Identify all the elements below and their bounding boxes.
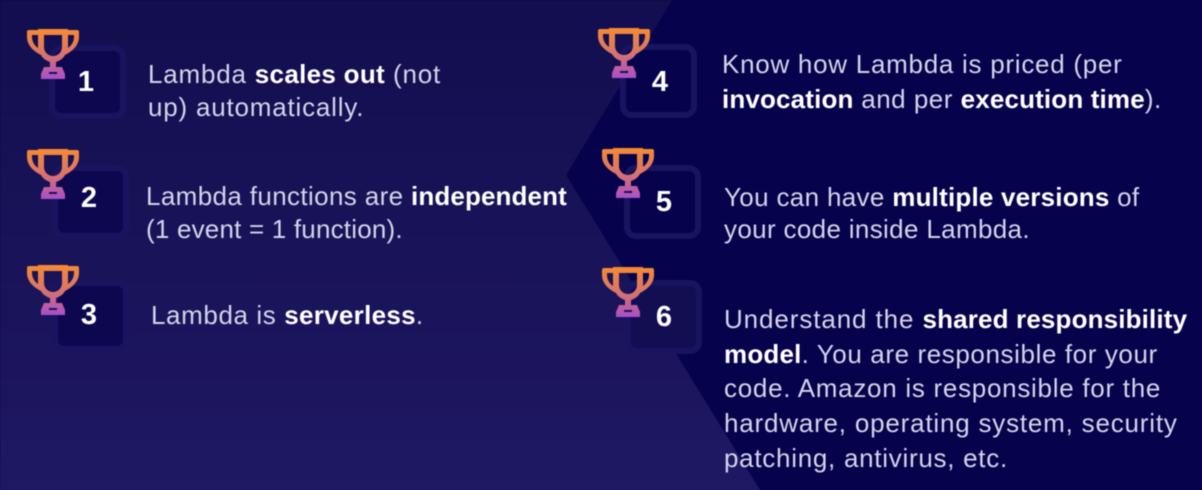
- text 1: Lambda scales out (not: [148, 59, 441, 89]
- text 5: You can have multiple versions of: [724, 182, 1139, 212]
- icon: trophy 1: [26, 28, 80, 80]
- text 5: your code inside Lambda.: [724, 214, 1030, 244]
- number 6: 6: [656, 301, 672, 333]
- text 4: [722, 49, 1162, 114]
- text 6: model. You are responsible for your: [724, 339, 1158, 369]
- icon: trophy 6: [601, 266, 655, 318]
- icon: trophy 3: [26, 264, 80, 316]
- icon: trophy 4: [597, 27, 651, 79]
- number 5: 5: [656, 186, 672, 218]
- icon: trophy 5: [601, 147, 655, 199]
- item 5: [601, 147, 1140, 244]
- number box 3: [52, 280, 129, 352]
- text 1: up) automatically.: [148, 92, 364, 122]
- icon: trophy 2: [26, 148, 80, 200]
- text 3: Lambda is serverless.: [151, 300, 424, 330]
- number 4: 4: [652, 66, 668, 98]
- number 1: 1: [78, 66, 94, 98]
- item 2: [26, 148, 568, 244]
- text 6: code. Amazon is responsible for the: [724, 373, 1161, 403]
- text 4: Know how Lambda is priced (per: [722, 49, 1123, 79]
- text 5: [724, 182, 1140, 244]
- text 1: [148, 59, 441, 122]
- text 6: [724, 304, 1188, 474]
- item 1: [26, 28, 441, 122]
- number box 2: [52, 165, 129, 239]
- item 6: [601, 266, 1188, 474]
- text 2: Lambda functions are independent: [146, 181, 567, 211]
- number 3: 3: [81, 299, 97, 331]
- item 3: [26, 264, 424, 346]
- text 6: patching, antivirus, etc.: [724, 443, 1008, 473]
- text 6: hardware, operating system, security: [724, 408, 1178, 438]
- number box 4: [620, 44, 697, 118]
- text 2: (1 event = 1 function).: [146, 214, 403, 244]
- number box 5: [624, 165, 701, 239]
- text 2: [146, 181, 568, 244]
- number box 6: [625, 280, 702, 354]
- number box 1: [49, 45, 126, 119]
- text 4: invocation and per execution time).: [722, 84, 1162, 114]
- item 4: [597, 27, 1162, 118]
- number 2: 2: [81, 182, 97, 214]
- text 6: Understand the shared responsibility: [724, 304, 1187, 334]
